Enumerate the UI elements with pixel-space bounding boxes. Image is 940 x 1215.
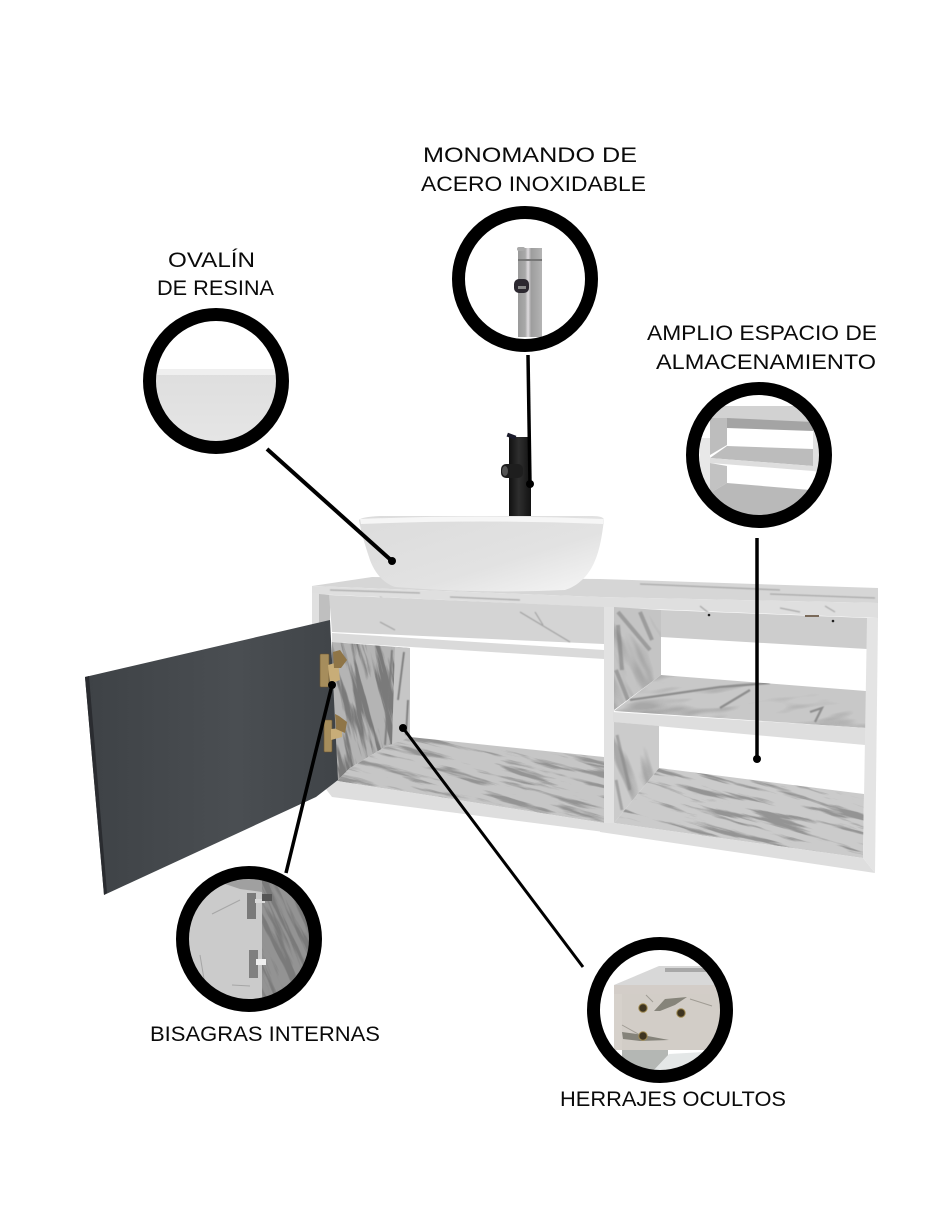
- right side panel: [863, 618, 878, 873]
- heading: HERRAJES OCULTOS: [560, 1087, 786, 1111]
- countertop: [312, 577, 878, 618]
- magnifier: [594, 944, 726, 1076]
- magnifier: [150, 314, 282, 450]
- callout: bisagras internas: [152, 866, 379, 1041]
- leader: bisagras: [286, 681, 336, 873]
- magnifier: [458, 212, 592, 346]
- leader: herrajes: [399, 724, 583, 967]
- right upper panel: [614, 607, 661, 710]
- callout: herrajes ocultos: [560, 944, 786, 1111]
- vanity cabinet: [224, 457, 940, 1010]
- door: [85, 620, 338, 895]
- apron lower strip: [332, 633, 604, 659]
- hinges: [320, 650, 347, 752]
- heading: MONOMANDO DE: [423, 143, 637, 167]
- inner left marble panel: [332, 642, 410, 780]
- callout: monomando: [421, 143, 646, 346]
- heading line two: DE RESINA: [157, 276, 275, 300]
- heading line two: ACERO INOXIDABLE: [421, 172, 646, 196]
- heading: BISAGRAS INTERNAS: [150, 1022, 380, 1046]
- bottom shelf right: [600, 768, 875, 873]
- leader: ovalín: [267, 449, 396, 565]
- center divider: [604, 607, 614, 833]
- leader: almacenamiento: [753, 538, 761, 763]
- left side edge: [312, 593, 330, 630]
- middle shelf: [614, 675, 866, 745]
- upper apron: [329, 595, 604, 644]
- leader: monomando: [526, 355, 534, 488]
- upper back panel: [661, 610, 867, 649]
- faucet: [501, 433, 531, 517]
- lower shelf left: [326, 737, 604, 832]
- magnifier: [692, 388, 826, 522]
- sink: [359, 516, 604, 591]
- heading: AMPLIO ESPACIO DE: [647, 321, 877, 345]
- heading line two: ALMACENAMIENTO: [656, 350, 876, 374]
- callout: ovalín de resina: [150, 247, 282, 450]
- magnifier: [176, 866, 322, 1012]
- callout: amplio espacio: [647, 321, 877, 522]
- heading: OVALÍN: [168, 247, 255, 272]
- lower panel: [614, 722, 659, 822]
